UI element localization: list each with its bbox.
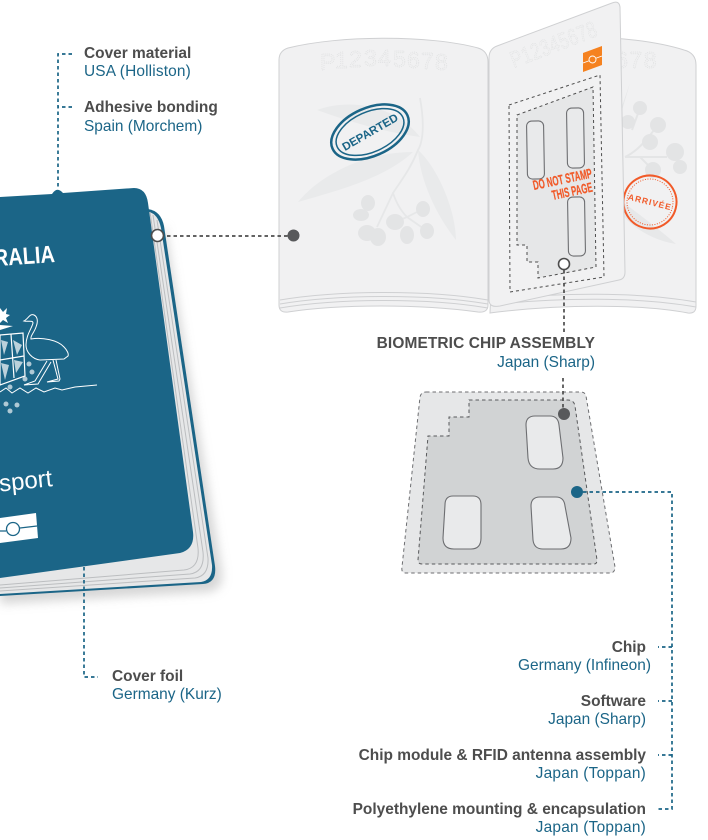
page watermark: [298, 98, 456, 246]
label: cover material: USA (Holliston): [84, 63, 191, 80]
shadow: [0, 225, 222, 604]
label: polyethylene mounting: Japan (Toppan): [536, 819, 646, 836]
shield: [0, 333, 25, 385]
chip area: [509, 75, 604, 292]
closed passport: [0, 188, 222, 604]
chip modules: [526, 416, 563, 469]
label: cover foil: Germany (Kurz): [112, 686, 222, 703]
chip symbol: [0, 513, 38, 543]
raised chip page: [489, 2, 625, 306]
open passport: [279, 2, 696, 313]
label: polyethylene mounting: Polyethylene mounting & encapsulation: [353, 801, 646, 818]
label: polyethylene mounting: [353, 801, 646, 836]
label: cover material: [84, 45, 191, 80]
coat of arms emblem: [0, 308, 97, 414]
label: chip module and antenna: Japan (Toppan): [536, 765, 646, 782]
marker: [152, 230, 164, 242]
label: software: [548, 693, 646, 728]
label: cover material: Cover material: [84, 45, 191, 62]
chip assembly: [402, 392, 615, 573]
label: chip: Germany (Infineon): [518, 657, 651, 674]
ground: [0, 385, 97, 393]
departed stamp: [323, 93, 417, 171]
markers: [558, 408, 570, 420]
label: adhesive bonding: [84, 99, 218, 135]
label: biometric chip assembly: [377, 335, 596, 371]
label: chip: Chip: [612, 639, 646, 656]
chip symbol: [583, 46, 602, 72]
antenna layer: [418, 400, 597, 564]
label: cover foil: Cover foil: [112, 668, 183, 685]
arrivee stamp: [618, 170, 682, 234]
label: adhesive bonding: Adhesive bonding: [84, 99, 218, 116]
right page: 5678: [601, 47, 658, 73]
label: software: Software: [581, 693, 646, 710]
marker: [288, 230, 300, 242]
label: cover foil: [112, 668, 222, 703]
passport number: P12345678: [320, 45, 448, 75]
arrivee stamp: ARRIVÉE: [627, 192, 673, 212]
page number: P12345678: [507, 17, 601, 73]
page watermark: [622, 90, 687, 244]
back cover: [0, 205, 215, 596]
page block: [0, 205, 212, 594]
emu: [24, 315, 68, 360]
label: software: Japan (Sharp): [548, 711, 646, 728]
marker: [558, 258, 570, 270]
left page: [279, 38, 488, 312]
encapsulation: [402, 392, 615, 573]
label: biometric chip assembly: Japan (Sharp): [497, 354, 595, 371]
wattle: [4, 362, 34, 414]
do not stamp notice: [532, 166, 594, 203]
do not stamp notice: DO NOT STAMP: [532, 166, 593, 193]
label: chip module and antenna: Chip module & RFID antenna assembly: [359, 747, 646, 764]
label: biometric chip assembly: BIOMETRIC CHIP ASSEMBLY: [377, 335, 596, 352]
departed stamp: DEPARTED: [340, 112, 401, 154]
connector lines: [58, 54, 672, 809]
label: adhesive bonding: Spain (Morchem): [84, 118, 202, 135]
front cover: [0, 188, 193, 578]
label: chip: [518, 639, 651, 674]
right page: [490, 38, 696, 313]
star: [0, 308, 10, 323]
do not stamp notice: THIS PAGE: [551, 180, 594, 203]
label: chip module and antenna: [359, 747, 646, 782]
